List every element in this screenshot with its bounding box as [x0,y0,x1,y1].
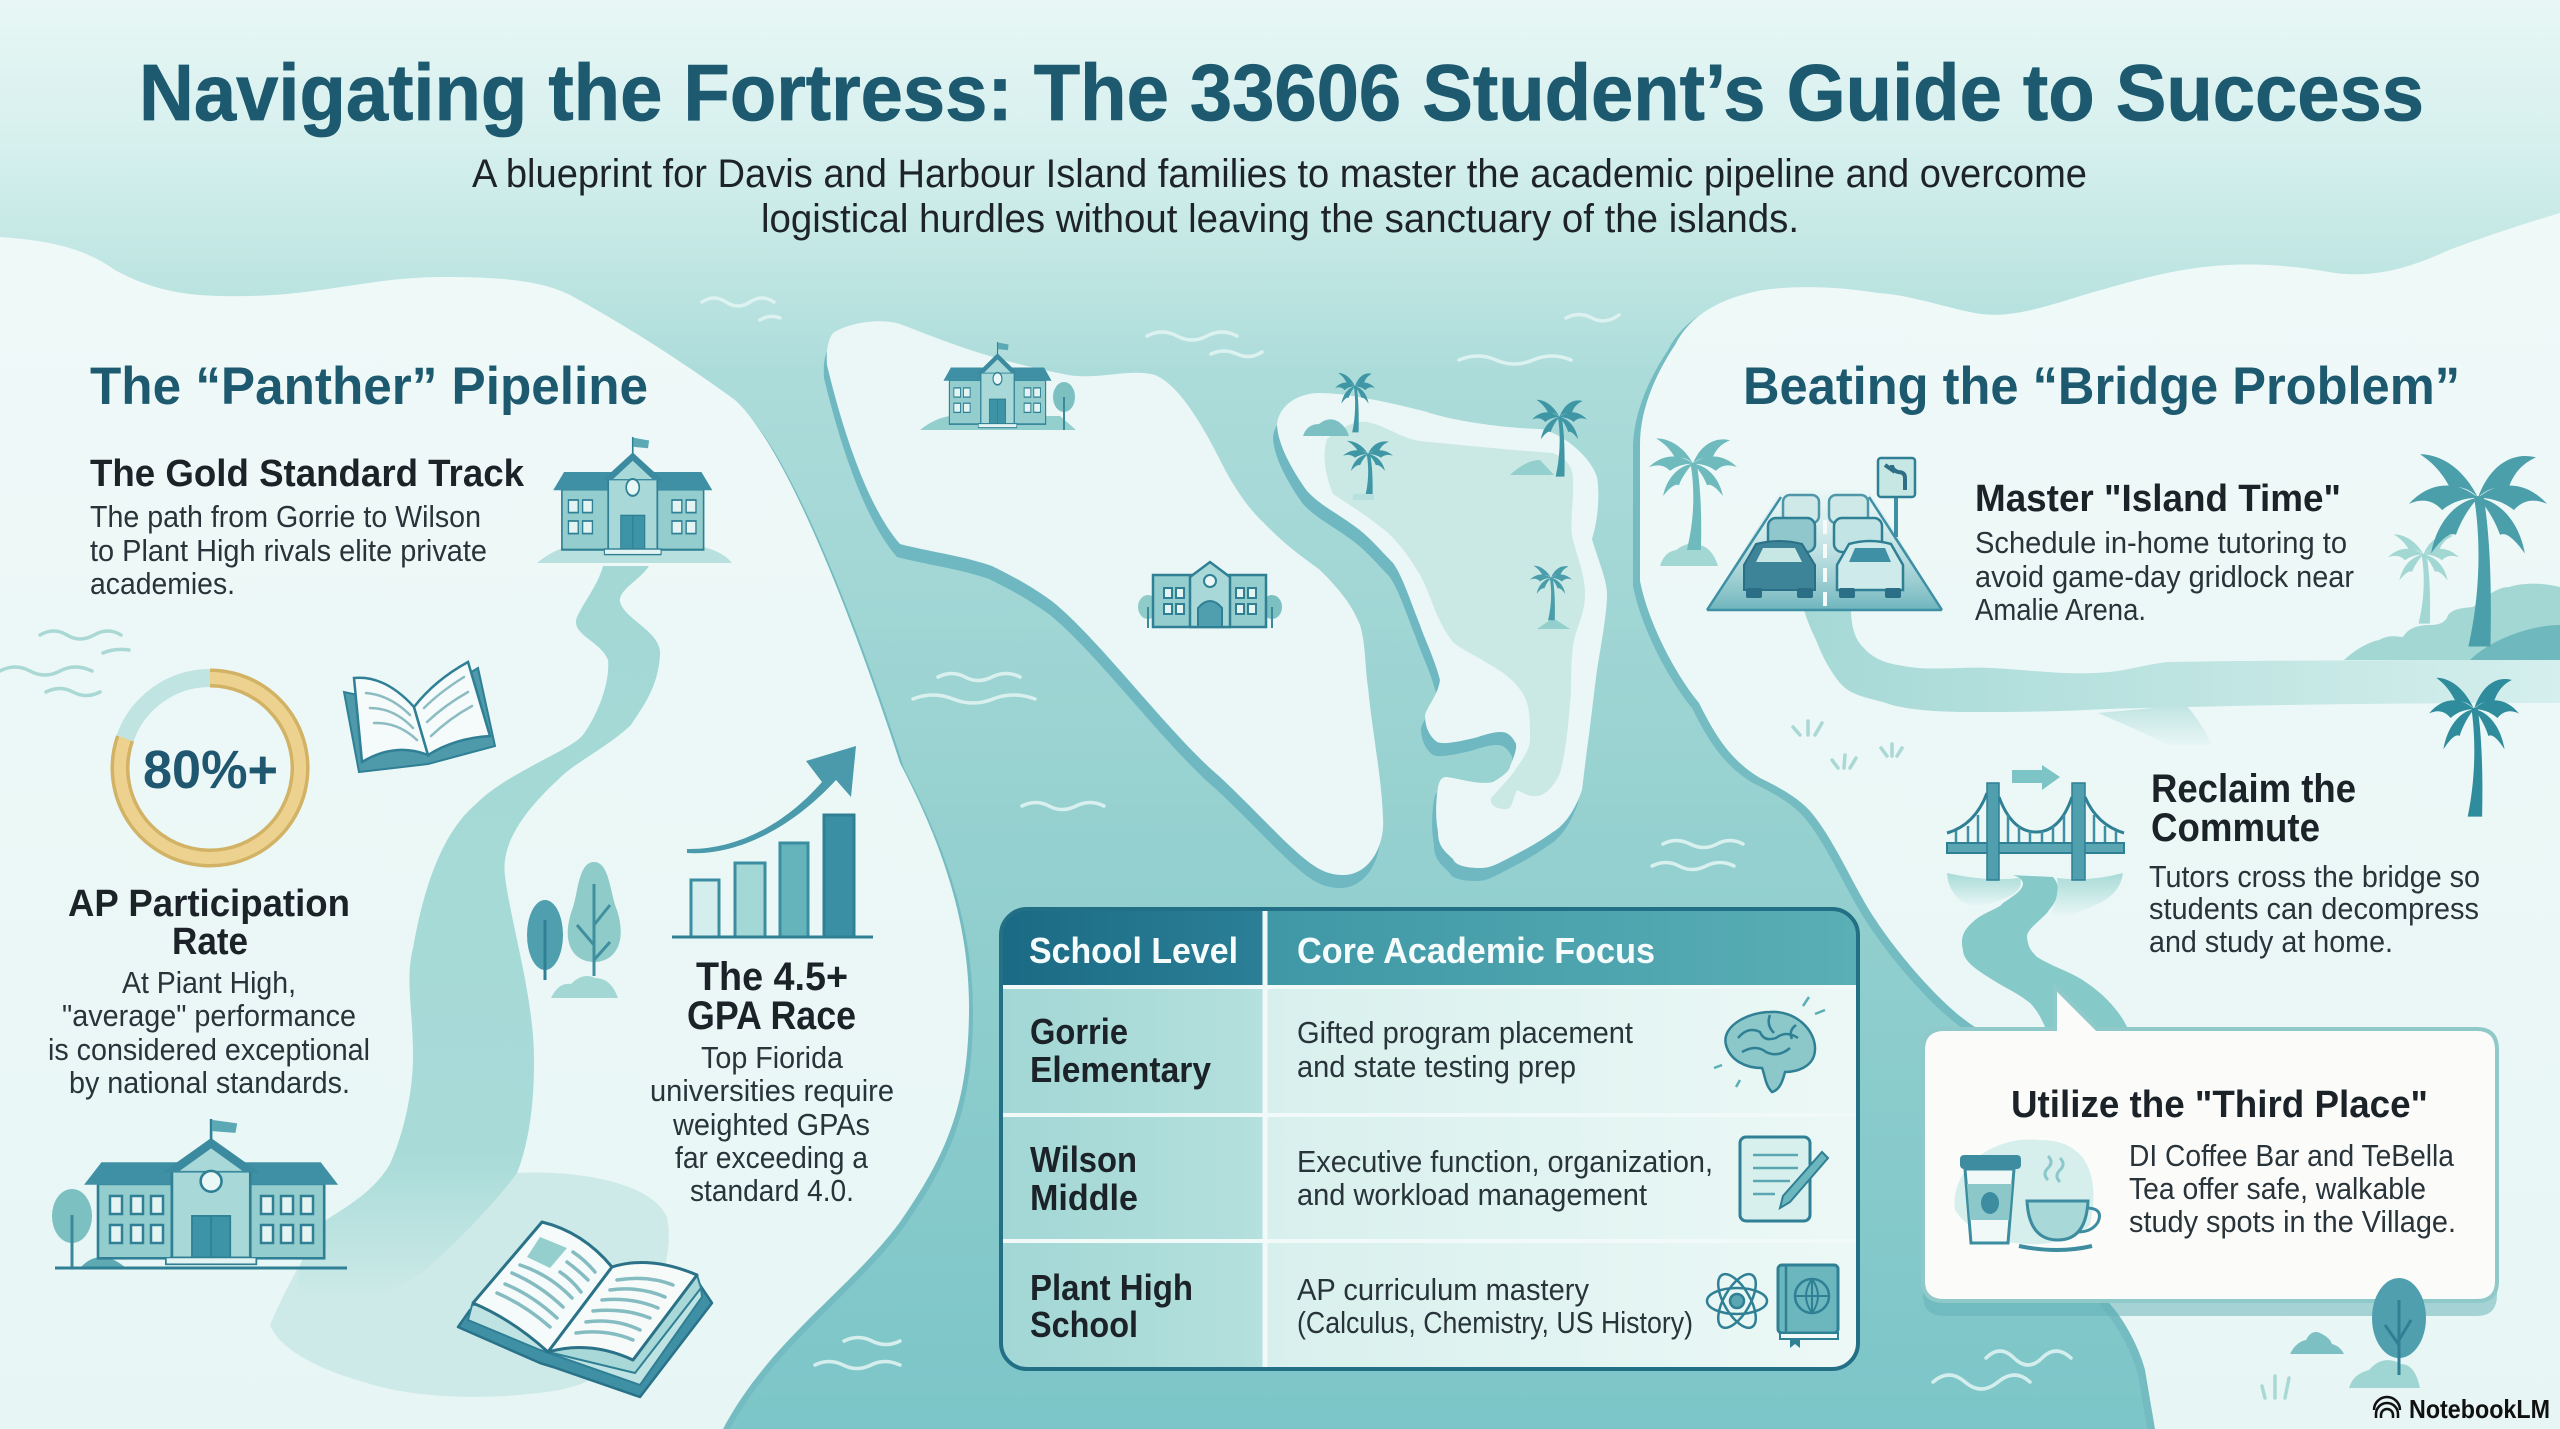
block: master island time: Master "Island Time" [1975,478,2341,520]
stat ring: 80%+: 80%+ [143,740,278,800]
row: Wilson Middle: Wilson [1030,1139,1137,1180]
icon: trees [527,862,621,998]
road: winding band [1804,610,2560,745]
river: pipeline path [297,566,660,1303]
table header [1029,930,1655,971]
icon: school on island, south [1138,562,1282,628]
callout: third place [1923,987,2497,1316]
water waves [702,298,2071,1389]
row: Gorrie Elementary: Elementary [1030,1049,1211,1090]
callout: third place: Utilize the "Third Place" [2011,1084,2428,1126]
icon: two-way arrow [2012,765,2060,790]
text: third place body: DI Coffee Bar and TeBella [2129,1138,2455,1173]
heading: bridge problem: Beating the “Bridge Problem” [1743,357,2460,416]
icon: school on island, north [920,342,1076,430]
block: gold standard track: The Gold Standard Track [90,453,525,495]
icon: open book lower [458,1222,712,1397]
block: reclaim the commute: students can decompress [2149,891,2479,926]
row: Gorrie Elementary: Gifted program placement [1297,1015,1633,1050]
stat ring: 80%+ [120,678,300,858]
title: Navigating the Fortress: The 33606 Student’s Guide to Success [139,48,2424,137]
icon: palm left [1649,438,1737,566]
left land [0,237,973,1429]
block: gold standard track: academies. [90,566,235,601]
row: Plant High School: AP curriculum mastery [1297,1272,1589,1307]
chart: rising GPA bars and arrow [672,746,873,937]
central island [824,321,1383,888]
text: third place body [2129,1138,2456,1239]
harbour island [1273,393,1607,881]
panel: Panther pipeline [0,357,894,1397]
river: bridge waterway [1962,875,2127,1027]
icon: school at top of pipeline [537,437,732,563]
icon: bridge [1947,783,2124,916]
icon: palm mid right [2429,678,2519,817]
icon: coffee and tea [1955,1140,2100,1250]
row: Plant High School: Plant High [1030,1267,1193,1308]
row: Gorrie Elementary [1030,1011,1633,1090]
block: master island time [1975,478,2354,627]
subtitle: A blueprint for Davis and Harbour Island families to master the academic pipeline and overcome [472,152,2087,196]
icon: traffic road and sign [1707,458,1942,610]
row: Wilson Middle [1030,1139,1713,1218]
text: GPA race [650,955,894,1208]
text: AP participation: "average" performance [62,998,356,1033]
block: master island time: Schedule in-home tutoring to [1975,525,2347,560]
row: Wilson Middle: Executive function, organization, [1297,1144,1713,1179]
icon: open book upper [344,662,495,772]
block: reclaim the commute: Reclaim the [2151,767,2356,811]
icon: atom [1707,1269,1767,1333]
icon: brain [1714,997,1825,1092]
small waves left [0,631,129,696]
subtitle: logistical hurdles without leaving the sanctuary of the islands. [761,197,1799,241]
icon: palms on harbour island [1303,373,1587,629]
pale pool under lower book [270,1173,669,1397]
row: Gorrie Elementary: and state testing prep [1297,1049,1576,1084]
panel: bridge problem [1649,357,2560,1398]
text: GPA race: weighted GPAs [672,1107,870,1142]
icon: notebook and pen [1740,1137,1828,1221]
icon: school bottom left [52,1119,347,1268]
text: GPA race: far exceeding a [675,1140,869,1175]
block: gold standard track: to Plant High rivals elite private [90,533,487,568]
row: Wilson Middle: and workload management [1297,1177,1647,1212]
subtitle [472,152,2087,241]
text: GPA race: GPA Race [687,994,856,1038]
table header: Core Academic Focus [1297,930,1655,971]
text: GPA race: Top Fiorida [701,1040,844,1075]
text: GPA race: The 4.5+ [696,955,848,999]
text: third place body: Tea offer safe, walkable [2129,1171,2426,1206]
block: master island time: avoid game-day gridlock near [1975,559,2354,594]
text: AP participation: by national standards. [69,1065,350,1100]
block: reclaim the commute: and study at home. [2149,924,2393,959]
block: master island time: Amalie Arena. [1975,592,2146,627]
text: AP participation: AP Participation [68,883,350,925]
block: gold standard track: The path from Gorrie to Wilson [90,499,481,534]
table header: School Level [1029,930,1238,971]
icon: palms and hills right [2344,454,2560,660]
table: school level and focus [1001,909,1858,1369]
header [139,48,2424,241]
row: Wilson Middle: Middle [1030,1177,1138,1218]
row: Plant High School [1030,1267,1693,1345]
heading: Panther pipeline: The “Panther” Pipeline [90,357,648,416]
right land [1633,213,2560,1429]
row: Gorrie Elementary: Gorrie [1030,1011,1128,1052]
row: Plant High School: School [1030,1304,1138,1345]
icon: tree and mounds [2262,1278,2426,1398]
text: GPA race: standard 4.0. [690,1173,854,1208]
text: AP participation: Rate [172,921,248,963]
text: third place body: study spots in the Village. [2129,1204,2456,1239]
grass tufts [1793,721,1902,768]
block: reclaim the commute [2149,767,2480,959]
block: gold standard track [90,453,525,601]
row: Plant High School: (Calculus, Chemistry, US History) [1297,1305,1693,1340]
text: AP participation [48,883,370,1100]
text: AP participation: At Piant High, [122,965,296,1000]
text: AP participation: is considered exceptional [48,1032,370,1067]
text: GPA race: universities require [650,1073,894,1108]
block: reclaim the commute: Commute [2151,806,2320,850]
icon: globe book [1778,1265,1838,1348]
block: reclaim the commute: Tutors cross the bridge so [2149,859,2480,894]
